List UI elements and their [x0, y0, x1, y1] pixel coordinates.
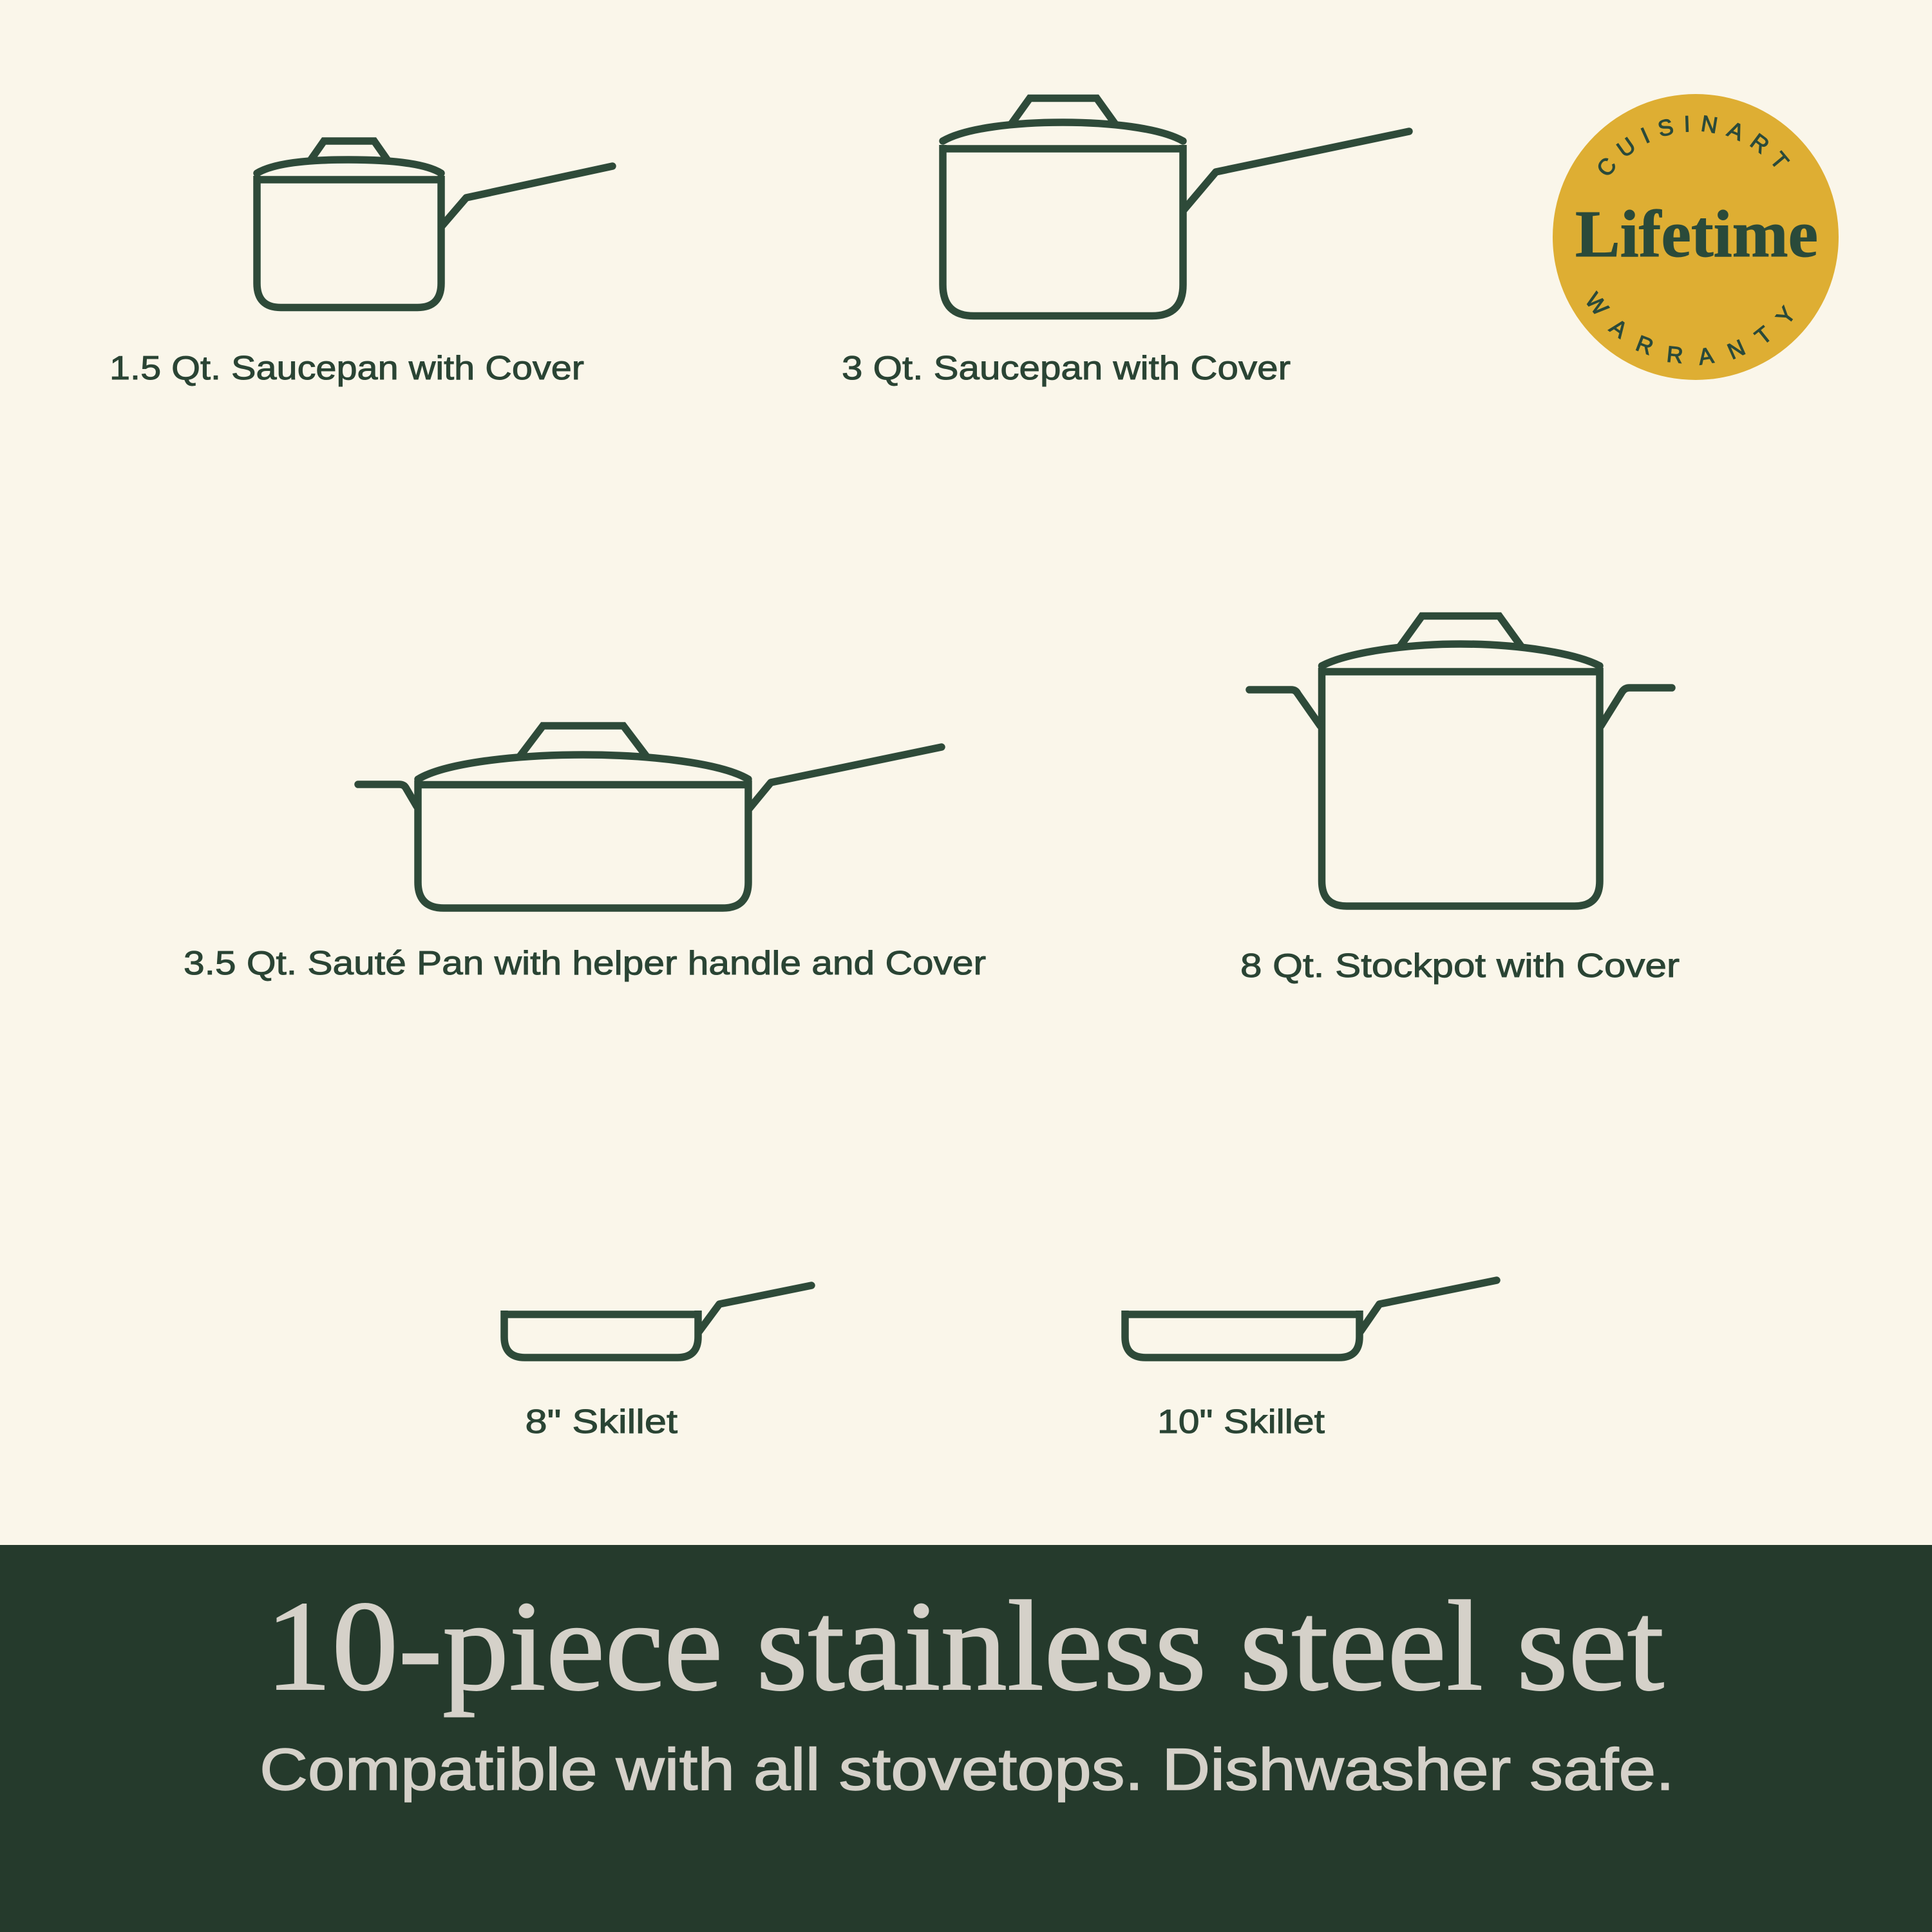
- panel: 8 inch skillet: [501, 1285, 811, 1441]
- badge text: CUISINART: CUISINART: [1598, 115, 1790, 175]
- panel: 1.5 Qt. saucepan: [109, 141, 612, 387]
- heading: 10-piece stainless steel set: 10-piece stainless steel set: [265, 1575, 1664, 1718]
- badge text: WARRANTY: WARRANTY: [1587, 290, 1793, 366]
- icon: 3.5 Qt. saute pan: [358, 726, 942, 908]
- label: 3 Qt. Saucepan with Cover: 3 Qt. Saucepan with Cover: [842, 350, 1291, 387]
- label: 3.5 Qt. Saute Pan with helper handle and Cover: 3.5 Qt. Sauté Pan with helper handle and Cover: [184, 945, 986, 982]
- icon: 8 inch skillet: [501, 1285, 811, 1358]
- icon: 8 Qt. stockpot: [1249, 616, 1672, 906]
- panel: 8 Qt. stockpot: [1240, 616, 1680, 985]
- badge: Cuisinart Lifetime Warranty: [1553, 94, 1839, 380]
- panel: 3.5 Qt. saute pan: [184, 726, 986, 982]
- icon: 1.5 Qt. saucepan: [254, 141, 612, 308]
- icon: 10 inch skillet: [1122, 1280, 1497, 1358]
- panel: bottom banner: [0, 1545, 1932, 1932]
- panel: 10 inch skillet: [1122, 1280, 1497, 1441]
- label: 8 Qt. Stockpot with Cover: 8 Qt. Stockpot with Cover: [1240, 947, 1680, 985]
- subheading: compatibility: Compatible with all stovetops. Dishwasher safe.: [260, 1737, 1674, 1803]
- icon: 3 Qt. saucepan: [940, 98, 1409, 316]
- label: 1.5 Qt. Saucepan with Cover: 1.5 Qt. Saucepan with Cover: [109, 350, 584, 387]
- badge text: Lifetime: Lifetime: [1575, 197, 1818, 271]
- label: 8" Skillet: 8" Skillet: [526, 1403, 678, 1441]
- label: 10" Skillet: 10" Skillet: [1157, 1403, 1325, 1441]
- panel: 3 Qt. saucepan: [842, 98, 1409, 387]
